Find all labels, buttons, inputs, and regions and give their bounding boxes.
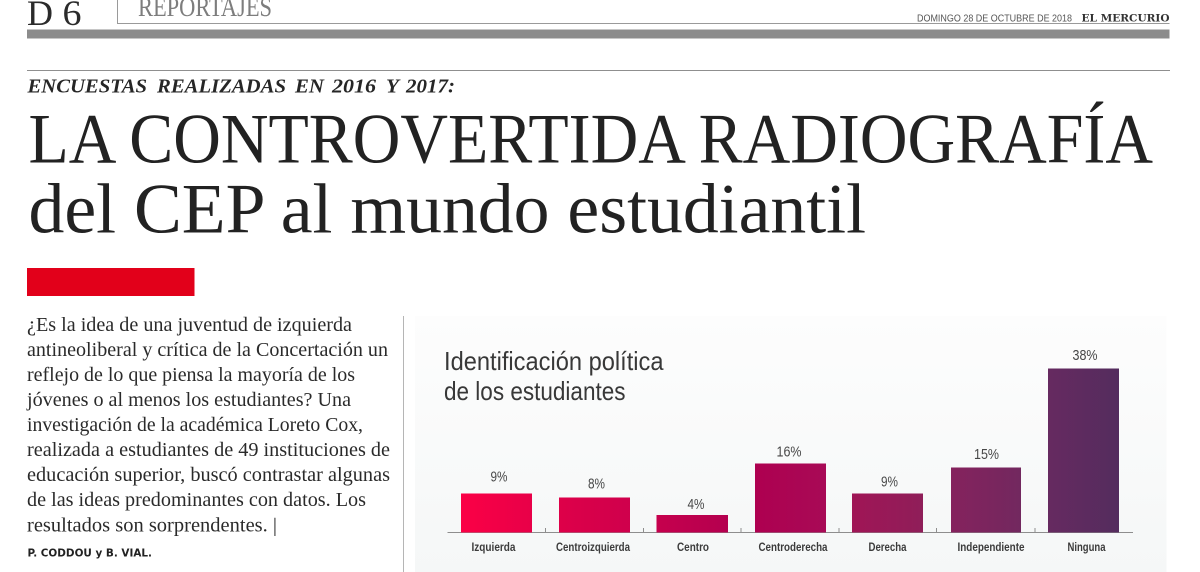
intro text: reflejo de lo que piensa la mayoría de los — [27, 364, 355, 386]
grey band — [27, 30, 1170, 38]
headline line 2: del CEP al mundo estudiantil — [28, 170, 866, 248]
intro text: antineoliberal y crítica de la Concertación un — [27, 339, 388, 361]
kicker — [26, 76, 455, 98]
bar: Derecha: Derecha — [868, 542, 907, 554]
bar: Centro: Centro — [677, 542, 709, 554]
bar: Izquierda: Izquierda — [472, 542, 516, 554]
bar: Independiente: Independiente — [958, 542, 1024, 554]
intro text: investigación de la académica Loreto Cox, — [27, 414, 363, 436]
bar: Izquierda: 9% — [490, 470, 508, 486]
kicker: Y — [386, 76, 402, 98]
bar: Derecha — [852, 474, 923, 554]
bar: Centroderecha: 16% — [776, 444, 802, 460]
red accent block — [27, 268, 194, 296]
bar: Izquierda — [461, 470, 532, 554]
bar: Ninguna: 38% — [1072, 348, 1098, 364]
intro text: de las ideas predominantes con datos. Los — [27, 489, 366, 511]
intro text: realizada a estudiantes de 49 instituciones de — [27, 439, 390, 461]
bar: Centroderecha: Centroderecha — [758, 542, 828, 554]
byline: P. CODDOU y B. VIAL. — [28, 548, 152, 560]
kicker: ENCUESTAS — [26, 76, 147, 98]
kicker: REALIZADAS — [156, 76, 286, 98]
bar: Ninguna — [1048, 348, 1119, 554]
kicker: 2016 — [331, 76, 377, 98]
panel background — [415, 316, 1166, 572]
intro text: educación superior, buscó contrastar algunas — [27, 464, 390, 486]
kicker: EN — [294, 76, 325, 98]
bar: Derecha: 9% — [881, 474, 898, 490]
header rule — [118, 0, 1170, 24]
page number — [27, 0, 82, 33]
bar: Ninguna: Ninguna — [1068, 542, 1106, 554]
bar: Centroizquierda: 8% — [588, 476, 605, 492]
bar: Independiente: 15% — [974, 447, 999, 463]
bar: Centro — [656, 497, 728, 554]
intro text: ¿Es la idea de una juventud de izquierda — [27, 314, 352, 336]
chart title — [444, 346, 664, 406]
bar: Centroizquierda: Centroizquierda — [556, 542, 631, 554]
newspaper name: EL MERCURIO — [1082, 14, 1170, 24]
bar: Centro: 4% — [688, 497, 705, 513]
bar: Centroizquierda — [556, 476, 631, 554]
intro text: jóvenes o al menos los estudiantes? Una — [26, 389, 351, 411]
bar: Centroderecha — [755, 444, 828, 554]
panel: political identification chart — [415, 316, 1166, 572]
chart title: de los estudiantes — [444, 376, 626, 406]
headline — [28, 100, 1153, 248]
page header — [27, 0, 1170, 38]
intro text — [26, 314, 390, 536]
axis — [448, 528, 1133, 532]
kicker: 2017: — [405, 76, 455, 98]
intro text: resultados son sorprendentes. | — [27, 514, 277, 536]
date line: DOMINGO 28 DE OCTUBRE DE 2018 — [917, 14, 1072, 24]
bar: Independiente — [951, 447, 1024, 554]
chart title: Identificación política — [444, 346, 664, 376]
